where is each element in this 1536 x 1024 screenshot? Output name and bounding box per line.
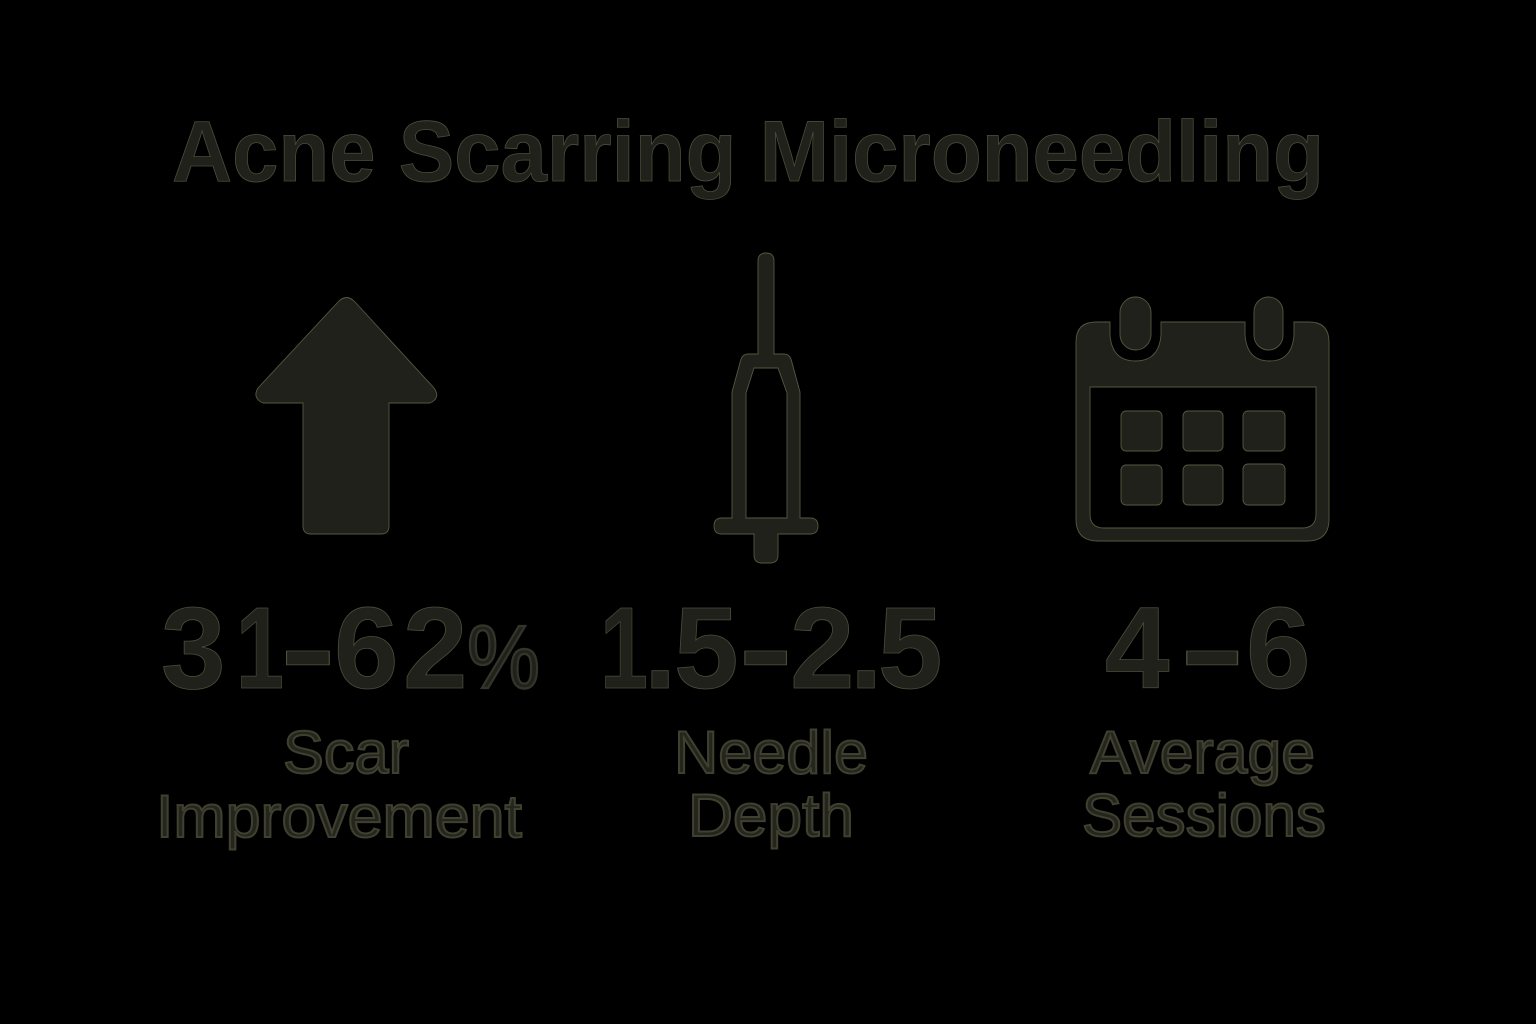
label: scar improvement: Improvement [156,783,522,850]
stat: 31-62%: 3 [161,583,226,713]
icon: calendar [1076,297,1329,541]
icon: syringe [714,253,818,563]
calendar rings [1120,297,1283,350]
label: average sessions [1082,719,1326,849]
stat: 1.5-2.5: .5 [644,583,739,713]
stat: 31-62%: 62 [334,583,468,713]
stat: 1.5-2.5 [600,583,943,713]
calendar day squares [1121,411,1285,505]
stat: 31-62% [161,583,540,713]
label: scar improvement: Scar [283,719,409,786]
stat: 1.5-2.5: - [738,583,793,713]
stat: 4-6 [1105,583,1311,713]
stat: 31-62%: 1 [236,583,284,713]
stat: 1.5-2.5: 2.5 [790,583,943,713]
label: average sessions: Sessions [1082,782,1326,849]
label: needle depth [674,719,868,849]
label: needle depth: Depth [688,782,854,849]
stat: 4-6: 6 [1246,583,1311,713]
stat: 31-62%: - [280,583,336,713]
stat: 31-62%: % [467,608,540,708]
label: needle depth: Needle [674,719,868,786]
label: average sessions: Average [1090,719,1315,786]
stat: 4-6: 4 [1105,583,1170,713]
icon: up arrow [256,298,437,534]
panel: average sessions [1076,297,1329,849]
stat: 1.5-2.5: 1 [600,583,648,713]
stat: 4-6: - [1179,583,1246,713]
label: scar improvement [156,719,522,850]
panel: scar improvement [156,298,540,850]
panel: needle depth [600,253,943,849]
title: Acne Scarring Microneedling [172,104,1324,200]
